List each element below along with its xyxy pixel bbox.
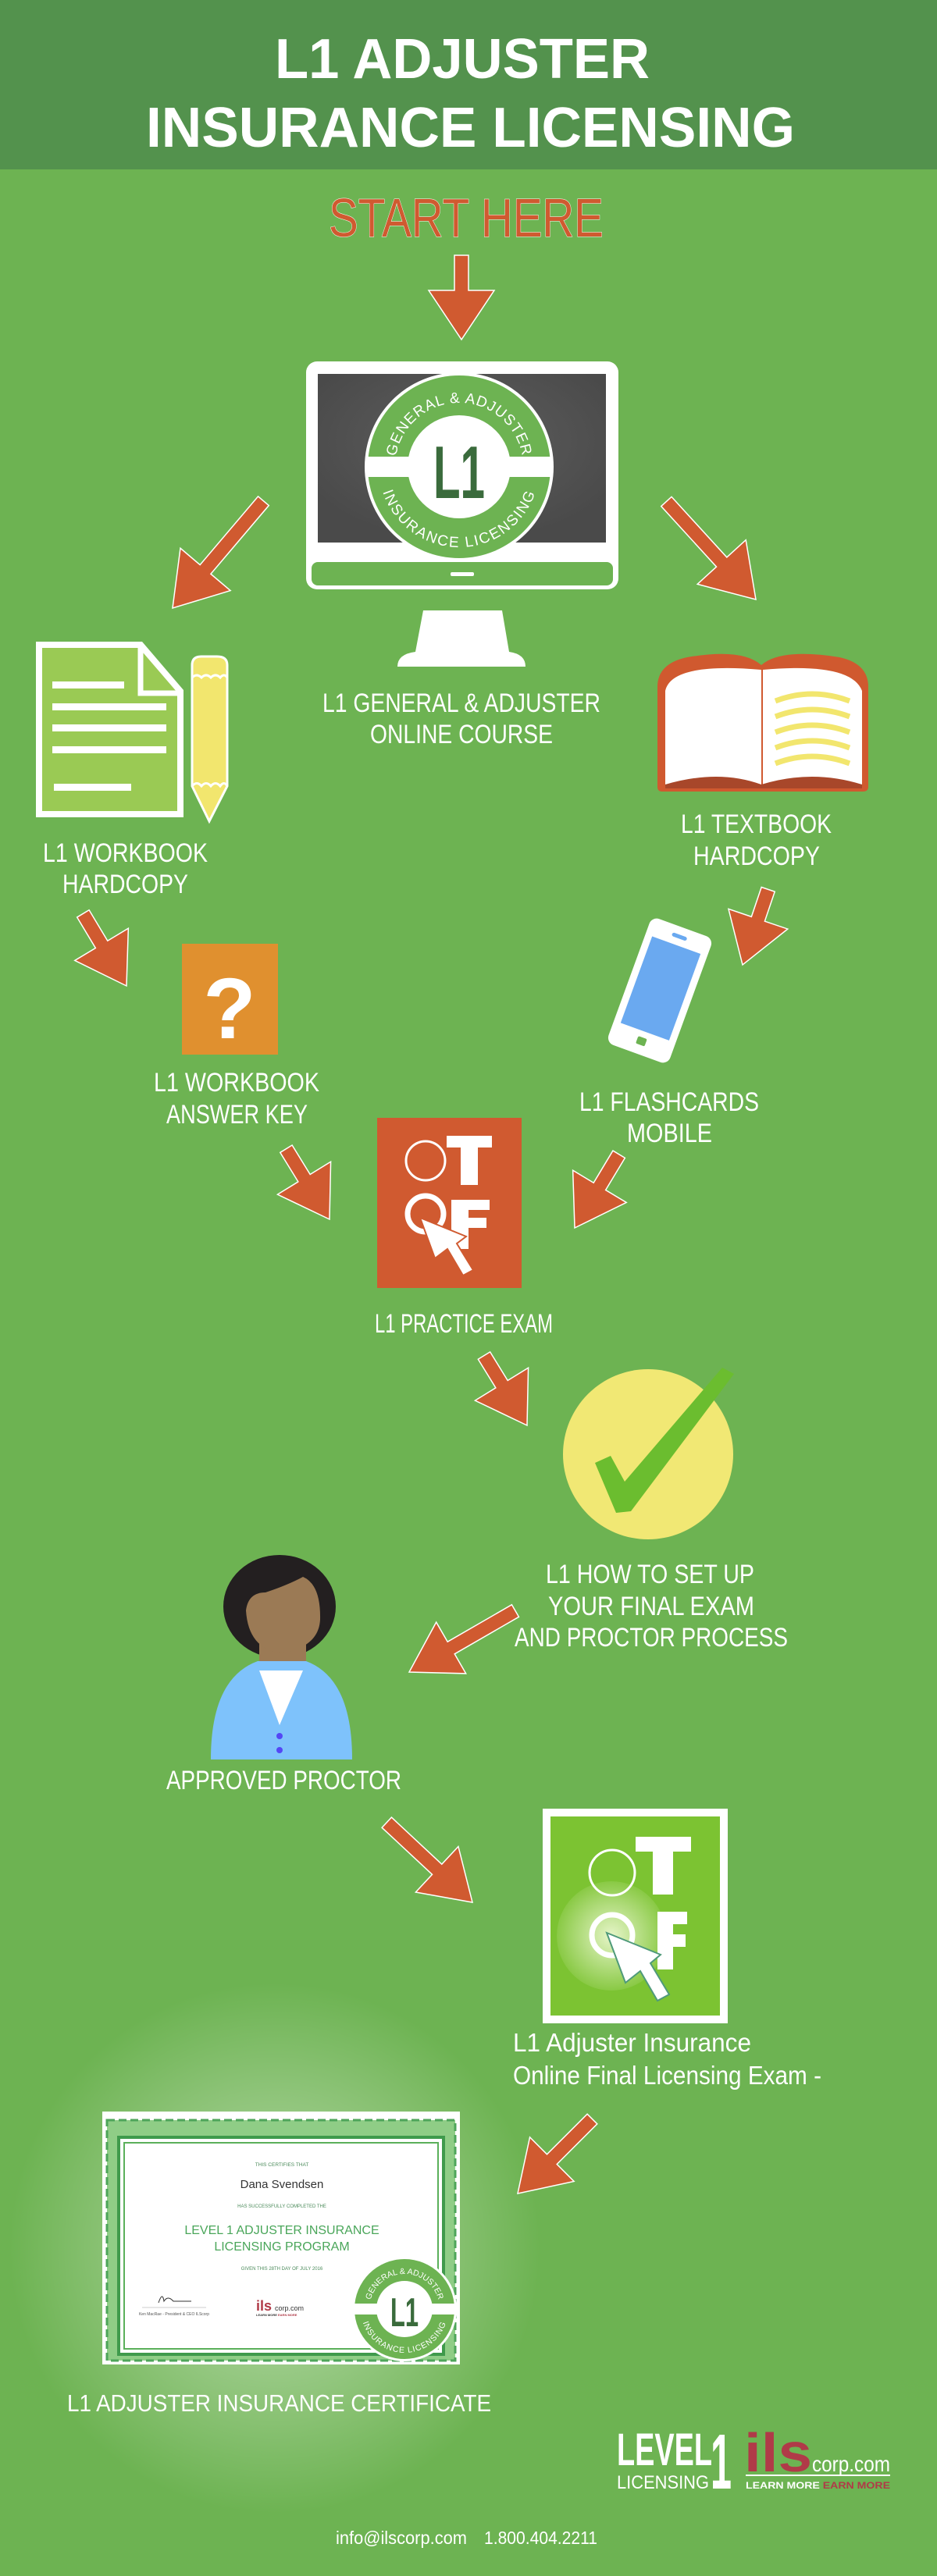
arrow: answer key to practice exam bbox=[259, 1133, 356, 1236]
logo: level1 licensing and ilscorp: LEVEL bbox=[617, 2425, 712, 2475]
certificate: LEARN MORE EARN MORE bbox=[256, 2313, 297, 2317]
title: L1 ADJUSTER bbox=[275, 28, 650, 91]
label: answer key: L1 WORKBOOK bbox=[154, 1068, 319, 1098]
arrow: monitor to workbook bbox=[148, 480, 288, 629]
label: workbook hardcopy: HARDCOPY bbox=[62, 870, 188, 899]
arrow: monitor to textbook bbox=[642, 479, 780, 621]
label: certificate: L1 ADJUSTER INSURANCE CERTIFICATE bbox=[67, 2389, 491, 2417]
badge: L1 bbox=[390, 2290, 419, 2336]
icon: textbook bbox=[657, 654, 868, 792]
label: flashcards mobile: MOBILE bbox=[627, 1119, 712, 1148]
label: answer key: ANSWER KEY bbox=[166, 1100, 308, 1130]
label: flashcards mobile bbox=[579, 1087, 759, 1148]
start here heading: START HERE bbox=[329, 187, 604, 248]
certificate: LEVEL 1 ADJUSTER INSURANCE bbox=[184, 2224, 379, 2237]
icon: answer key question box: ? bbox=[203, 961, 256, 1057]
certificate: Ken MacRae - President & CEO ILScorp bbox=[139, 2312, 209, 2317]
logo: level1 licensing and ilscorp: LEARN MORE EARN MORE bbox=[746, 2480, 890, 2491]
title: INSURANCE LICENSING bbox=[146, 97, 795, 159]
arrow: setup to proctor bbox=[394, 1585, 530, 1698]
label: online course bbox=[322, 688, 600, 749]
icon: mobile phone bbox=[606, 916, 714, 1065]
label: final exam setup: L1 HOW TO SET UP bbox=[546, 1560, 754, 1589]
logo: level1 licensing and ilscorp: ils bbox=[744, 2422, 812, 2483]
label: final exam: L1 Adjuster Insurance bbox=[513, 2028, 751, 2057]
arrow: proctor to final exam bbox=[365, 1799, 493, 1925]
footer contact: info@ilscorp.com bbox=[336, 2528, 467, 2548]
icon: final licensing exam bbox=[543, 1809, 728, 2023]
label: practice exam: L1 PRACTICE EXAM bbox=[375, 1309, 553, 1339]
arrow: flashcards to practice exam bbox=[548, 1138, 646, 1244]
label: textbook hardcopy bbox=[681, 809, 832, 871]
icon: practice exam bbox=[377, 1118, 522, 1288]
arrow: start down bbox=[429, 255, 494, 340]
logo: level1 licensing and ilscorp: 1 bbox=[711, 2418, 732, 2506]
badge bbox=[354, 2259, 456, 2361]
icon: proctor person bbox=[211, 1555, 352, 1759]
certificate: THIS CERTIFIES THAT bbox=[255, 2162, 308, 2168]
badge: GENERAL & ADJUSTER bbox=[387, 393, 531, 455]
certificate: ils bbox=[256, 2298, 272, 2314]
arrow: workbook to answer key bbox=[56, 898, 153, 1002]
icon: answer key question box bbox=[182, 944, 278, 1057]
certificate: GIVEN THIS 28TH DAY OF JULY 2016 bbox=[241, 2267, 323, 2272]
label: final exam setup bbox=[515, 1560, 788, 1653]
icon: monitor with course badge bbox=[306, 361, 618, 667]
certificate bbox=[102, 2112, 460, 2364]
label: flashcards mobile: L1 FLASHCARDS bbox=[579, 1087, 759, 1117]
label: final exam setup: YOUR FINAL EXAM bbox=[548, 1592, 754, 1621]
certificate: LICENSING PROGRAM bbox=[214, 2240, 350, 2254]
label: online course: ONLINE COURSE bbox=[370, 720, 553, 749]
label: workbook hardcopy bbox=[43, 838, 208, 899]
icon: check mark circle bbox=[563, 1368, 734, 1539]
arrow: textbook to flashcards bbox=[713, 880, 798, 975]
arrow: practice exam to checklist bbox=[458, 1340, 554, 1442]
logo: level1 licensing and ilscorp bbox=[617, 2418, 890, 2506]
certificate: Dana Svendsen bbox=[240, 2178, 323, 2191]
title bbox=[146, 28, 795, 159]
badge: L1 bbox=[433, 431, 485, 514]
label: approved proctor: APPROVED PROCTOR bbox=[166, 1766, 401, 1795]
badge: INSURANCE LICENSING bbox=[383, 489, 534, 548]
label: textbook hardcopy: HARDCOPY bbox=[693, 841, 820, 871]
logo: level1 licensing and ilscorp: LICENSING bbox=[617, 2472, 709, 2493]
certificate: HAS SUCCESSFULLY COMPLETED THE bbox=[237, 2204, 326, 2209]
certificate: corp.com bbox=[275, 2304, 304, 2312]
arrow: final exam to certificate bbox=[496, 2097, 615, 2215]
header band bbox=[0, 0, 937, 169]
label: final exam bbox=[513, 2028, 821, 2090]
logo: level1 licensing and ilscorp: corp.com bbox=[812, 2452, 890, 2476]
label: answer key bbox=[154, 1068, 319, 1130]
label: final exam: Online Final Licensing Exam - bbox=[513, 2061, 821, 2090]
label: workbook hardcopy: L1 WORKBOOK bbox=[43, 838, 208, 868]
footer contact bbox=[336, 2528, 597, 2548]
label: final exam setup: AND PROCTOR PROCESS bbox=[515, 1623, 788, 1653]
label: online course: L1 GENERAL & ADJUSTER bbox=[322, 688, 600, 718]
icon: workbook document and pencil bbox=[36, 642, 227, 821]
badge: GENERAL & ADJUSTER bbox=[365, 2268, 444, 2300]
footer contact: 1.800.404.2211 bbox=[484, 2528, 597, 2548]
label: textbook hardcopy: L1 TEXTBOOK bbox=[681, 809, 832, 839]
badge: INSURANCE LICENSING bbox=[363, 2322, 445, 2353]
badge bbox=[365, 374, 554, 558]
